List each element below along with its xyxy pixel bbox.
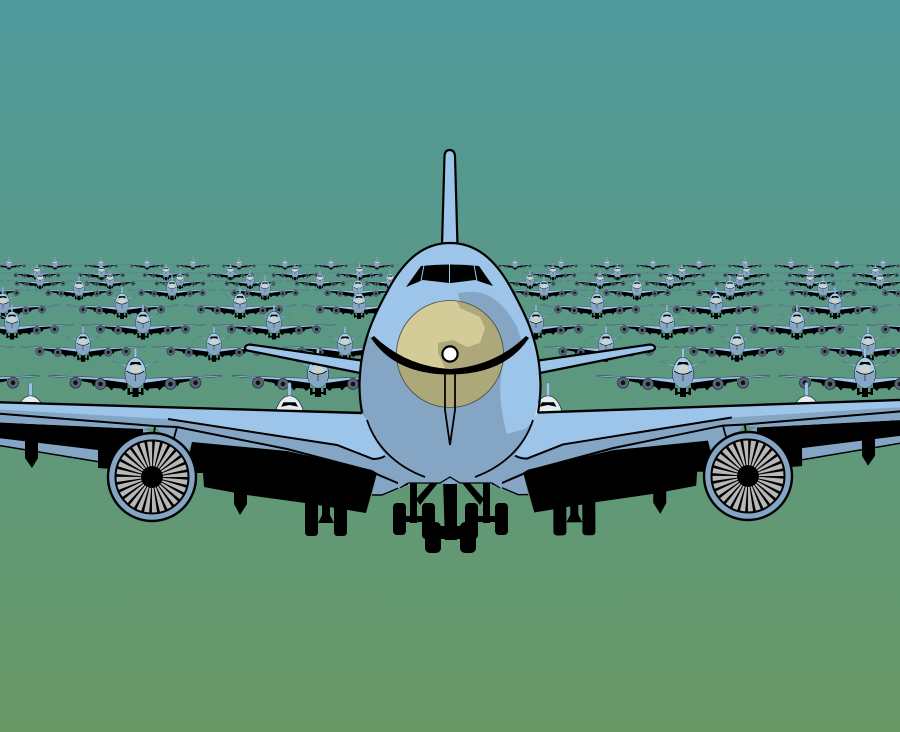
inner flap track [234,490,247,515]
main plane [0,150,900,553]
radome [396,300,504,408]
lower right fuselage line [475,420,533,477]
right wing [488,400,900,536]
windscreen [406,264,493,287]
black nose stripe [371,336,529,374]
left horizontal stabilizer [245,344,365,374]
fuselage nose [350,243,545,490]
wing upper surface [0,402,392,459]
row of distant planes 4 [0,275,900,300]
outer flap track [25,440,38,468]
fuselage light base [360,243,540,484]
row of mid-distance planes 6 [0,305,900,339]
right horizontal stabilizer [535,344,655,374]
pylon [154,426,177,438]
inner underside shadow [185,442,377,513]
radome outline [396,300,504,408]
outer underside shadow [0,422,143,470]
fuselage belly [398,440,502,489]
left engine [108,433,196,521]
row of distant planes 1 [0,257,900,270]
left wing [0,402,412,536]
tail fin [442,150,458,246]
lower left fuselage line [367,420,425,477]
wing landing gear [305,500,347,536]
row of distant planes 3 [0,270,900,289]
belly bottom edge [400,477,500,488]
outer flap strip [0,436,100,462]
wing surface line rear [0,413,400,484]
nose probe lines [445,373,455,445]
fuselage outline [359,243,541,413]
wing lower surface [0,402,412,496]
row of mid-distance planes 5 [0,287,900,319]
row of planes hidden behind the wings [16,382,821,429]
right engine [704,432,792,520]
row of near planes 8 [0,348,900,397]
radome shadow [398,302,503,408]
radome light base [396,300,504,408]
row of mid-distance planes 7 [0,326,900,362]
wing top edge [0,402,362,413]
fuselage shading [360,292,531,484]
row of distant planes 2 [0,263,900,280]
white nose dot [442,346,458,362]
wing root edge [372,484,408,495]
center landing gear [393,480,508,553]
wing surface line front [168,419,385,459]
